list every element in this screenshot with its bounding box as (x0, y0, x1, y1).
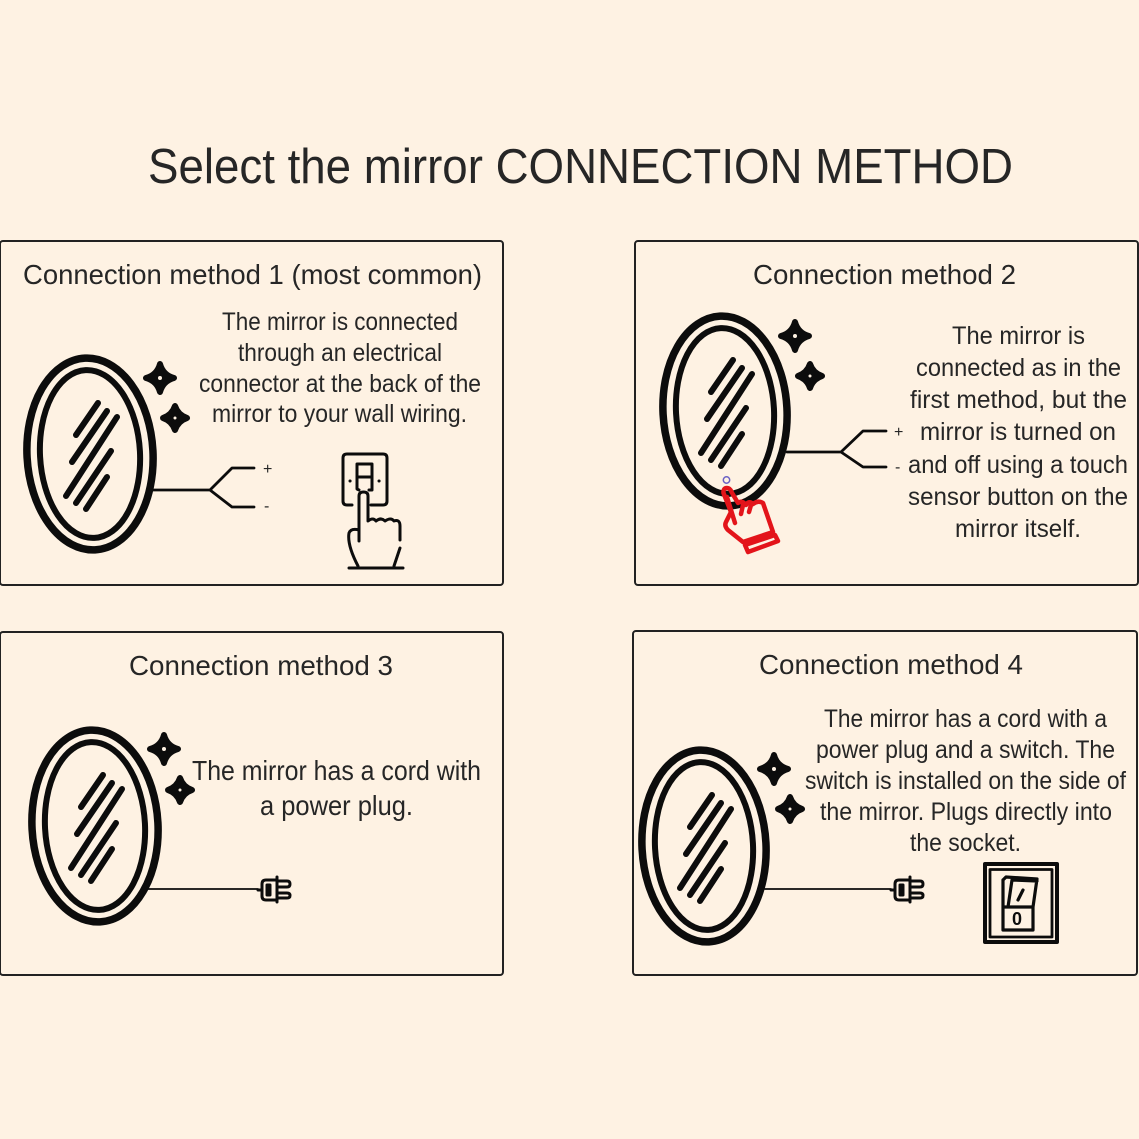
panel: connection method 4 (633, 631, 1137, 975)
heading: method 2: Connection method 2 (753, 259, 1016, 290)
text block: method 2 description: first method, but the (910, 386, 1127, 414)
text block: method 4 description: the socket. (910, 829, 1021, 857)
text block: method 3 description (192, 755, 481, 821)
icon: rocker switch (985, 864, 1057, 942)
icon: sparkles 4 (760, 755, 802, 821)
wire with plus and minus leads 2: + (894, 424, 903, 441)
text block: method 2 description: and off using a touch (908, 451, 1128, 479)
panel: connection method 2 (635, 241, 1138, 585)
wire and power plug 3 (147, 877, 290, 902)
heading: method 1: Connection method 1 (most common) (23, 259, 482, 290)
icon: mirror 4 (637, 747, 771, 945)
text block: method 2 description (908, 322, 1128, 543)
text block: method 2 description: mirror is turned on (920, 418, 1116, 446)
text block: method 2 description: mirror itself. (955, 515, 1081, 543)
text block: method 1 description: through an electrical (238, 339, 442, 367)
text block: method 1 description: The mirror is connected (222, 308, 458, 336)
panel: connection method 3 (0, 632, 503, 975)
icon: rocker switch: 0 (1012, 909, 1022, 929)
icon: sparkles 2 (781, 322, 822, 388)
heading: method 3: Connection method 3 (129, 650, 393, 681)
wire with plus and minus leads 2: - (895, 459, 900, 476)
title: Select the mirror CONNECTION METHOD (148, 140, 1013, 194)
text block: method 1 description (199, 308, 481, 428)
text block: method 2 description: connected as in the (916, 354, 1121, 382)
text block: method 1 description: connector at the back of the (199, 370, 481, 398)
text block: method 4 description (805, 705, 1126, 857)
icon: touch sensor dot (723, 477, 730, 483)
text block: method 4 description: The mirror has a cord with a (824, 705, 1107, 733)
text block: method 3 description: a power plug. (260, 790, 413, 821)
text block: method 2 description: sensor button on the (908, 483, 1128, 511)
wire with plus and minus leads 2 (787, 424, 903, 476)
icon: mirror 2 (658, 313, 792, 509)
wire with plus and minus leads 1: - (264, 498, 269, 515)
panel: connection method 1 (0, 241, 503, 585)
icon: mirror 1 (22, 355, 158, 553)
icon: mirror 3 (27, 727, 163, 925)
text block: method 4 description: the mirror. Plugs directly into (820, 798, 1112, 826)
icon: sparkles 3 (150, 735, 192, 802)
wire with plus and minus leads 1 (152, 461, 272, 515)
icon: sparkles 1 (146, 364, 187, 430)
icon: red touch hand (723, 488, 778, 552)
text block: method 3 description: The mirror has a cord with (192, 755, 481, 786)
text block: method 2 description: The mirror is (952, 322, 1085, 350)
wire with plus and minus leads 1: + (263, 461, 272, 478)
text block: method 4 description: power plug and a switch. The (816, 736, 1115, 764)
heading: method 4: Connection method 4 (759, 649, 1023, 680)
icon: wall switch with hand (343, 454, 403, 568)
text block: method 1 description: mirror to your wall wiring. (212, 400, 467, 428)
wire and power plug 4 (765, 877, 923, 902)
